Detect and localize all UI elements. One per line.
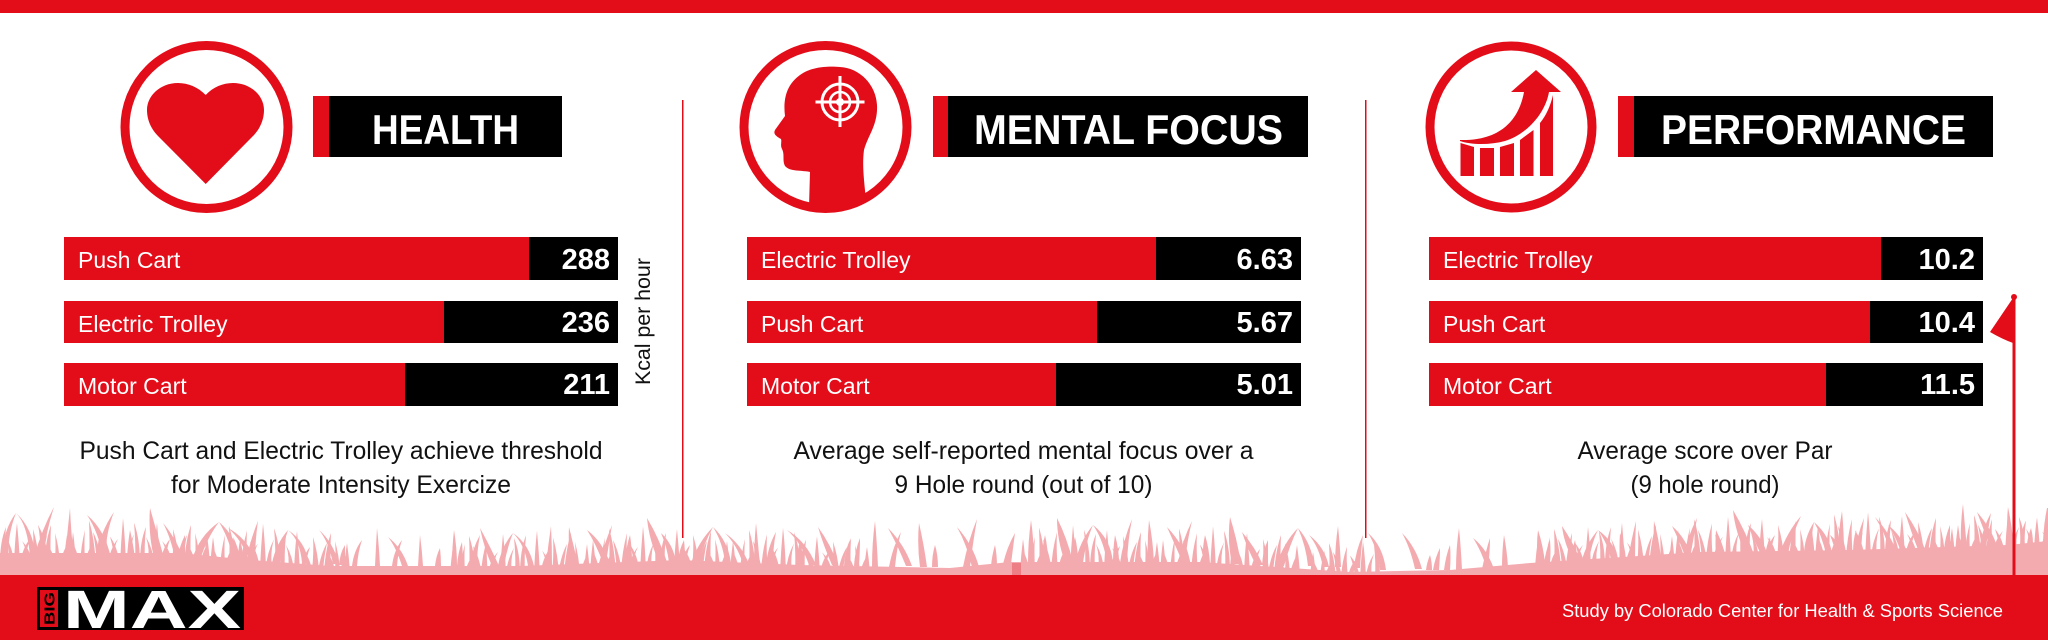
bar: push cart 288: 288 [562, 244, 610, 276]
caption [80, 437, 602, 499]
bar: push cart 288: Push Cart [78, 247, 181, 273]
caption: for Moderate Intensity Exercize [171, 471, 511, 499]
bar: push cart 10.4: Push Cart [1443, 311, 1546, 337]
bar: electric trolley 236: Electric Trolley [78, 311, 228, 337]
bar: motor cart 5.01: Motor Cart [761, 373, 870, 399]
grass silhouette [0, 504, 2048, 577]
heading: health: HEALTH [372, 106, 519, 153]
divider [1365, 100, 1366, 538]
axis label: Kcal per hour [631, 258, 655, 385]
icon: heart in circle [125, 46, 288, 208]
bar: electric trolley 10.2: 10.2 [1919, 244, 1975, 276]
caption [1578, 437, 1832, 499]
bar: motor cart 5.01: 5.01 [1237, 369, 1293, 401]
caption [794, 437, 1254, 499]
bar: push cart 5.67 [747, 301, 1301, 343]
heading: mental focus: MENTAL FOCUS [974, 106, 1283, 153]
bar: push cart 288 [64, 237, 618, 280]
logo: Big Max: MAX [63, 580, 241, 640]
heading: performance: PERFORMANCE [1661, 106, 1966, 153]
bar: electric trolley 236 [64, 301, 618, 343]
panel: performance [1429, 46, 1993, 499]
bar: push cart 5.67: Push Cart [761, 311, 864, 337]
bar: motor cart 11.5: 11.5 [1920, 369, 1975, 401]
bar: motor cart 5.01 [747, 363, 1301, 406]
caption: 9 Hole round (out of 10) [894, 471, 1152, 499]
bar: electric trolley 6.63: 6.63 [1237, 244, 1293, 276]
heading: health [313, 96, 562, 157]
icon: head with target [744, 46, 907, 208]
darker grass patch [1012, 563, 1021, 575]
footer band [0, 575, 2048, 640]
bar: electric trolley 10.2 [1429, 237, 1983, 280]
heading: mental focus [933, 96, 1308, 157]
heading: performance [1618, 96, 1993, 157]
caption: Average self-reported mental focus over a [794, 437, 1254, 465]
icon: rising chart arrow [1430, 46, 1592, 208]
bar: push cart 10.4: 10.4 [1919, 307, 1975, 339]
caption: (9 hole round) [1630, 471, 1780, 499]
bar: motor cart 211 [64, 363, 618, 406]
panel: mental focus [744, 46, 1308, 499]
caption: Push Cart and Electric Trolley achieve threshold [80, 437, 602, 465]
bar: electric trolley 236: 236 [562, 307, 610, 339]
source note: Study by Colorado Center for Health & Sports Science [1562, 601, 2003, 621]
bar: push cart 10.4 [1429, 301, 1983, 343]
bar: electric trolley 6.63 [747, 237, 1301, 280]
icon: golf flag [1990, 294, 2017, 575]
bar: motor cart 211: Motor Cart [78, 373, 187, 399]
panel: health [64, 46, 655, 499]
bar: motor cart 11.5: Motor Cart [1443, 373, 1552, 399]
bar: push cart 5.67: 5.67 [1237, 307, 1293, 339]
logo: Big Max [37, 580, 244, 640]
divider [682, 100, 684, 538]
bar: electric trolley 10.2: Electric Trolley [1443, 247, 1593, 273]
bar: motor cart 11.5 [1429, 363, 1983, 406]
bar: electric trolley 6.63: Electric Trolley [761, 247, 911, 273]
top red band [0, 0, 2048, 13]
caption: Average score over Par [1578, 437, 1832, 465]
bar: motor cart 211: 211 [563, 369, 610, 401]
logo: Big Max: BIG [42, 592, 58, 625]
